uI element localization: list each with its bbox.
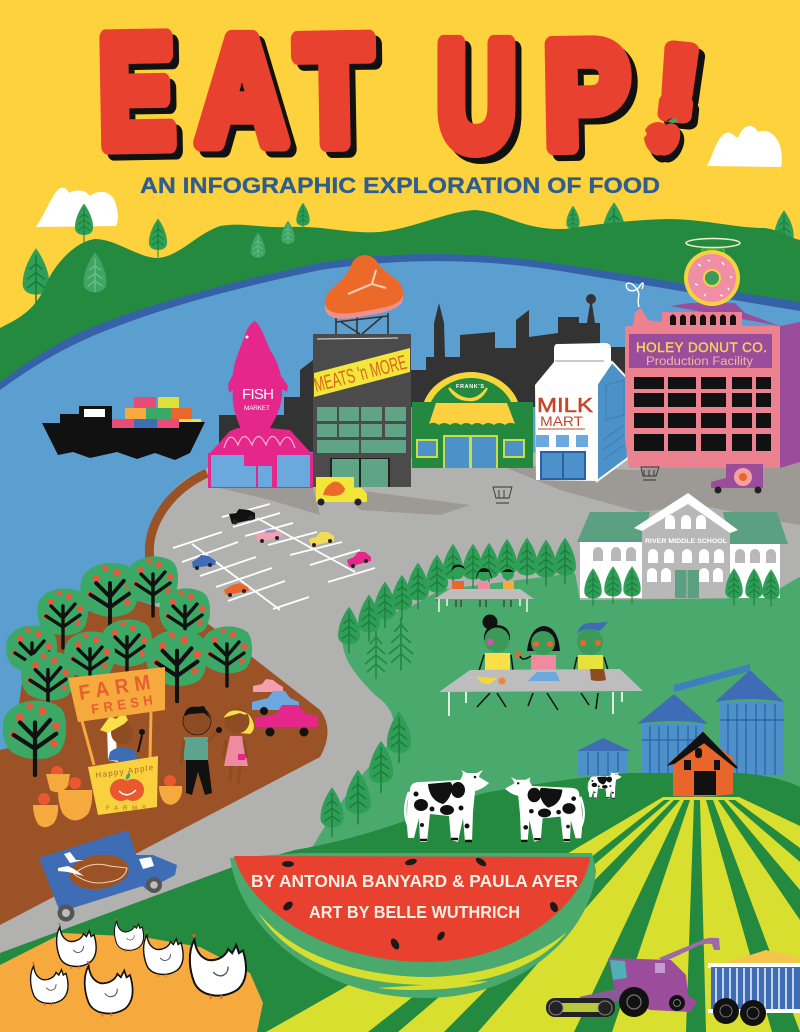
skyline behind stores bbox=[411, 297, 625, 407]
farm fresh sign: FRESH bbox=[90, 692, 154, 717]
icon: left cloud bbox=[36, 188, 118, 227]
donut delivery truck bbox=[711, 464, 763, 494]
meat delivery truck bbox=[316, 477, 367, 506]
icon: steak sign bbox=[325, 255, 403, 319]
icon: right cloud bbox=[707, 126, 782, 167]
building shadows on ground bbox=[220, 445, 800, 525]
farm fresh sign bbox=[68, 667, 165, 722]
icon: apple on exclamation mark bbox=[644, 118, 684, 163]
school building bbox=[577, 493, 788, 598]
title: T bbox=[296, 6, 373, 177]
tree line along parking lot bbox=[338, 538, 576, 679]
farm fresh sign: FARM bbox=[77, 671, 152, 705]
title: A bbox=[197, 6, 287, 176]
fish sign: FISH bbox=[242, 386, 274, 403]
man visitor bbox=[181, 706, 222, 795]
fish market building bbox=[208, 321, 313, 488]
skyline left of fish bbox=[219, 360, 313, 452]
purple combine harvester bbox=[546, 938, 720, 1017]
seeds bbox=[282, 856, 560, 951]
meats n more building bbox=[311, 255, 411, 487]
distant hill trees behind ridge bbox=[23, 202, 794, 306]
turkey delivery truck bbox=[39, 830, 177, 922]
fish sign: MARKET bbox=[244, 405, 270, 412]
grass field bbox=[305, 573, 800, 860]
river rim bbox=[0, 254, 800, 760]
icon: apple atop skyline bbox=[586, 294, 596, 304]
chickens bbox=[31, 918, 246, 1016]
visitors cars at farm stand bbox=[252, 679, 318, 736]
icon: chimney smoke bbox=[626, 283, 643, 307]
trees along the road bbox=[321, 711, 411, 837]
parking lot lines bbox=[173, 504, 375, 610]
counter sign: Happy Apple bbox=[95, 763, 154, 780]
author credit: BY ANTONIA BANYARD & PAULA AYER bbox=[251, 871, 578, 891]
faint trees on ridge bbox=[84, 221, 295, 292]
donut sign panel: Production Facility bbox=[646, 356, 753, 368]
milk carton store: MILK bbox=[537, 395, 594, 417]
fruit baskets bbox=[33, 766, 182, 827]
donut sign panel bbox=[629, 334, 772, 368]
produce store: FRANK'S bbox=[456, 384, 484, 390]
school trees bbox=[584, 566, 780, 607]
small picnic table with kids bbox=[434, 564, 534, 612]
big picnic table with kids bbox=[439, 614, 643, 716]
vendor bbox=[100, 712, 145, 762]
counter sign: FARMS bbox=[106, 806, 146, 812]
donut factory bbox=[625, 238, 800, 468]
farm barn bbox=[670, 733, 737, 797]
crop field rows bbox=[266, 797, 800, 1032]
icon: donut with halo bbox=[684, 238, 740, 306]
icon: smiling apple bbox=[110, 773, 144, 801]
milk carton store: MART bbox=[540, 413, 583, 429]
cargo ship bbox=[42, 397, 205, 460]
shopping carts bbox=[493, 467, 659, 503]
steak sign stand bbox=[336, 313, 388, 334]
counter sign bbox=[88, 756, 158, 815]
kid with blue cap bbox=[574, 622, 608, 670]
kid with bun bbox=[478, 614, 513, 674]
gray ground and road bbox=[0, 440, 800, 958]
grain truck bbox=[708, 950, 800, 1026]
fish sign bbox=[228, 321, 288, 430]
title: ! bbox=[654, 27, 703, 138]
kid with black hair bbox=[515, 626, 560, 671]
meats sign: MEATS 'n MORE bbox=[311, 350, 409, 397]
river water bbox=[0, 261, 800, 760]
farm fresh stand bbox=[68, 667, 165, 815]
icon: turkey bbox=[58, 851, 131, 893]
title: U bbox=[437, 11, 516, 181]
title: P bbox=[543, 11, 631, 179]
school building: RIVER MIDDLE SCHOOL bbox=[645, 538, 727, 545]
orange chicken yard bbox=[0, 933, 263, 1032]
illustrator credit: ART BY BELLE WUTHRICH bbox=[309, 902, 520, 922]
milk carton store bbox=[535, 343, 628, 481]
green ridge hill bbox=[0, 210, 800, 400]
watermelon slice with author credits bbox=[230, 853, 596, 998]
brown orchard ground bbox=[0, 598, 328, 925]
donut sign panel: HOLEY DONUT CO. bbox=[636, 340, 767, 355]
parked cars bbox=[192, 509, 371, 597]
dark green pasture hill bbox=[0, 773, 800, 1032]
cows bbox=[405, 770, 622, 842]
subtitle: AN INFOGRAPHIC EXPLORATION OF FOOD bbox=[140, 173, 660, 198]
apple orchard trees bbox=[3, 556, 252, 775]
woman visitor bbox=[223, 708, 254, 784]
grain silos bbox=[577, 664, 784, 775]
produce store bbox=[412, 372, 533, 468]
brown shoreline bbox=[149, 473, 207, 560]
title bbox=[98, 3, 703, 181]
title: E bbox=[98, 3, 176, 179]
